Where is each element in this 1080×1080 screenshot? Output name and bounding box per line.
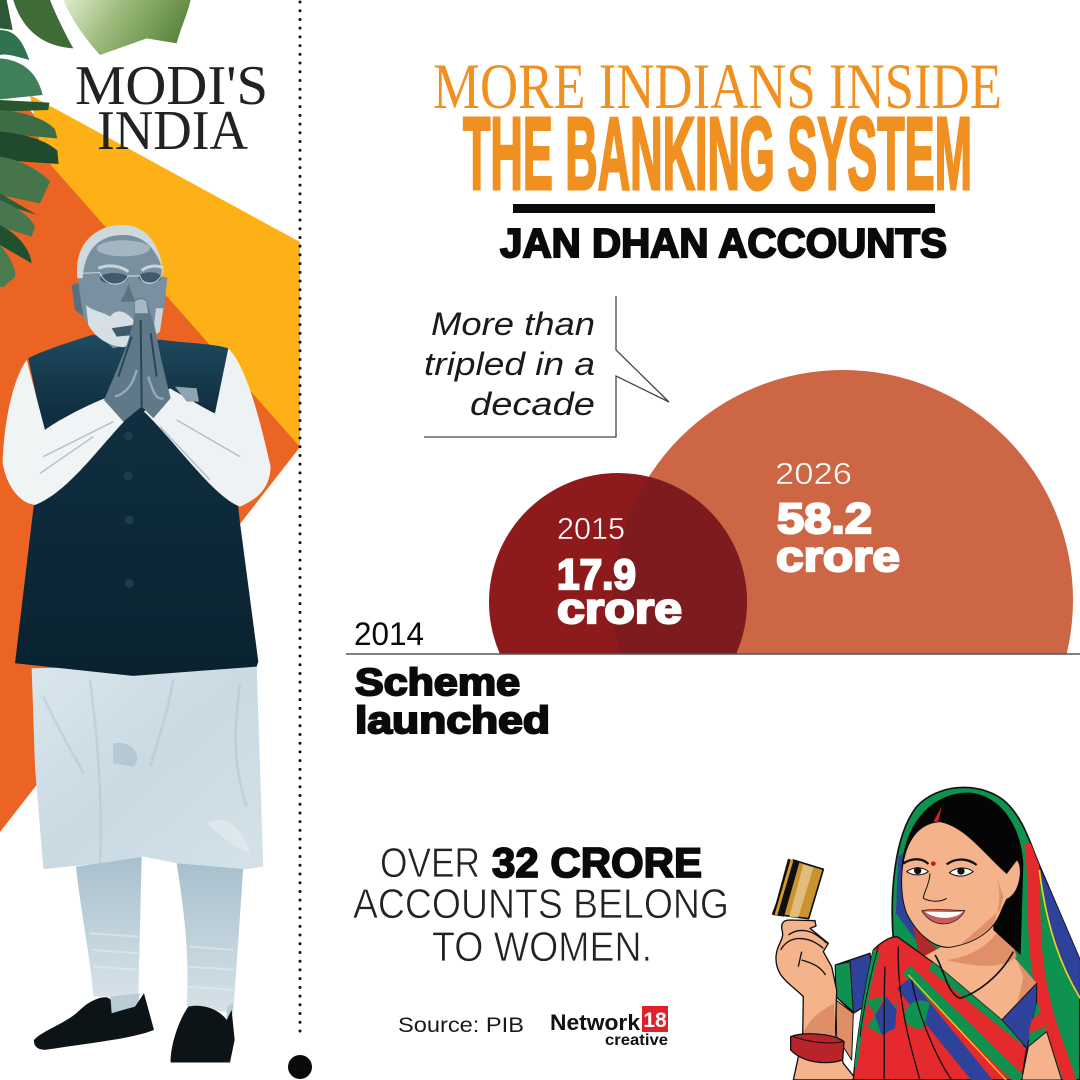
right sleeve — [144, 348, 271, 507]
bangle — [791, 1034, 844, 1063]
label: 2026: 58.2 — [777, 495, 872, 543]
label: 2015 — [557, 511, 682, 633]
saree border — [852, 947, 1027, 1080]
circle: 2026 — [613, 370, 1073, 830]
neck — [923, 913, 1037, 1020]
text: women's accounts — [353, 839, 729, 970]
dotted timeline — [298, 2, 302, 1036]
legs — [76, 857, 142, 997]
buttons — [124, 432, 133, 440]
veil stripes — [896, 843, 1080, 1080]
baseline — [346, 653, 1080, 655]
callout: more than tripled: tripled in a — [424, 346, 595, 382]
necklace — [935, 952, 1013, 998]
callout: more than tripled: decade — [470, 386, 595, 422]
logo: Network18 creative — [550, 1006, 668, 1049]
logo: Network18 creative: creative — [605, 1032, 668, 1049]
text: women's accounts: OVER — [380, 839, 480, 886]
label: 2015: crore — [557, 585, 682, 633]
background shape: yellow — [30, 95, 300, 447]
background shape: orange — [0, 100, 300, 832]
heading: Modi's India: MODI'S — [75, 55, 268, 117]
subheading: Jan Dhan accounts: JAN DHAN ACCOUNTS — [500, 220, 947, 266]
logo: Network18 creative: Network — [550, 1010, 641, 1035]
pocket square — [175, 387, 199, 402]
saree front — [853, 937, 1027, 1080]
label: 2014 scheme launched — [354, 616, 550, 742]
logo: Network18 creative: 18 — [643, 1009, 667, 1032]
callout: more than tripled: More than — [431, 306, 595, 342]
icon: monstera leaves — [0, 0, 191, 287]
heading: Modi's India — [75, 55, 268, 162]
saree motifs — [867, 997, 897, 1035]
face — [902, 822, 1020, 947]
callout: more than tripled — [424, 296, 669, 437]
label: 2014 scheme launched: launched — [355, 700, 550, 742]
chart: proportional circles — [346, 370, 1080, 655]
source: Source: PIB — [398, 1013, 524, 1037]
label: 2015: 17.9 — [557, 551, 636, 599]
divider bar — [513, 204, 935, 213]
label: 2015: 2015 — [557, 511, 625, 546]
arm and hand — [776, 920, 857, 1080]
head — [72, 231, 167, 348]
back sleeve — [835, 953, 875, 1013]
text: women's accounts: ACCOUNTS BELONG — [353, 880, 729, 927]
heading: Modi's India: INDIA — [97, 100, 249, 162]
shoulder — [1022, 1032, 1062, 1080]
veil — [892, 787, 1080, 1080]
illustration: woman holding bank card — [773, 787, 1080, 1080]
hands — [104, 298, 171, 422]
timeline end dot — [288, 1055, 312, 1079]
left sleeve — [3, 360, 124, 505]
card — [773, 859, 823, 919]
label: 2026: 2026 — [775, 456, 852, 491]
text: women's accounts: 32 CRORE — [492, 839, 702, 886]
vest — [15, 335, 258, 676]
circle: 2015 — [489, 473, 747, 731]
label: 2014 scheme launched: Scheme — [355, 662, 520, 704]
label: 2014 scheme launched: 2014 — [354, 616, 424, 652]
text: women's accounts: TO WOMEN. — [432, 923, 652, 970]
shoes — [34, 993, 154, 1050]
blouse — [1002, 983, 1037, 1050]
label: 2026: crore — [776, 533, 900, 581]
red lining — [913, 927, 938, 960]
label: 2026 — [775, 456, 900, 581]
kurta — [32, 665, 263, 869]
hair — [902, 793, 1023, 955]
figure: Modi in namaste — [3, 225, 271, 1063]
